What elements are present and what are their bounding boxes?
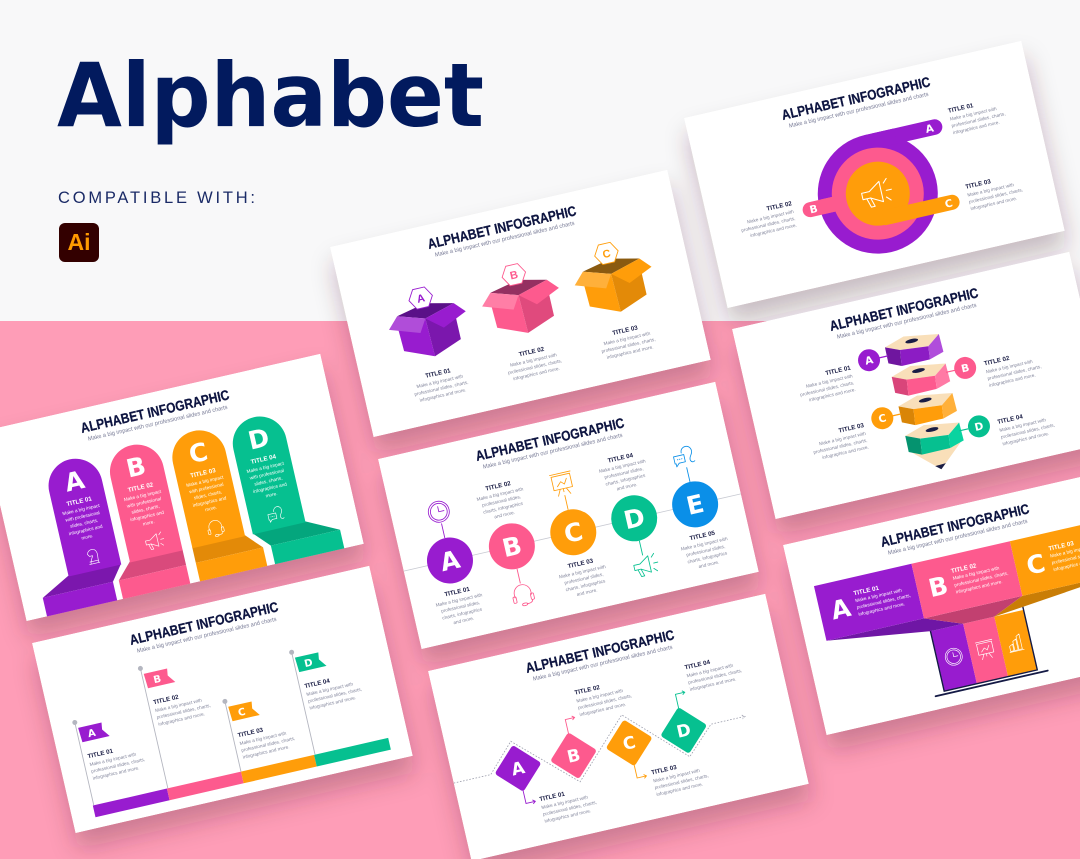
arch D: with professional xyxy=(249,468,284,481)
label B xyxy=(944,341,1044,397)
diamond B: Make a big impact with xyxy=(576,688,624,704)
flag A: infographics and more. xyxy=(92,765,140,781)
node D: TITLE 04 xyxy=(607,452,634,465)
label D xyxy=(957,399,1057,455)
text: title 02: infographics and more. xyxy=(750,223,797,238)
arch B: more. xyxy=(142,519,155,527)
arch B: B xyxy=(123,451,148,484)
node C: TITLE 03 xyxy=(567,558,594,570)
ring A: A xyxy=(924,122,936,136)
pencil segment A xyxy=(883,329,944,369)
node E xyxy=(672,446,728,568)
text: title 03: professional slides, charts, xyxy=(968,187,1023,204)
slide subtitle: Make a big impact with our professional slides and charts xyxy=(482,433,623,471)
flag C: Make a big impact with xyxy=(239,730,287,746)
node D: D xyxy=(621,502,648,535)
text: title 02: professional slides, charts, xyxy=(507,358,562,375)
slide subtitle: Make a big impact with our professional slides and charts xyxy=(434,221,575,259)
flag B: B xyxy=(152,674,162,686)
node B: Make a big impact with xyxy=(476,486,524,502)
label A: infographics and more. xyxy=(809,387,856,403)
slide heading: ALPHABET INFOGRAPHIC xyxy=(828,284,980,334)
node E: and more. xyxy=(698,560,720,569)
flag D: professional slides, charts, xyxy=(307,687,362,704)
arch A: more. xyxy=(81,533,94,541)
label B: professional slides, charts, xyxy=(987,364,1042,381)
diamond A: professional slides, charts, xyxy=(542,800,597,817)
node B xyxy=(476,481,535,606)
label D: professional slides, charts, xyxy=(1000,422,1055,440)
arch D: more. xyxy=(265,491,278,498)
dashed path arrow xyxy=(454,714,746,784)
diamond A: TITLE 01 xyxy=(539,791,566,803)
pencil tip xyxy=(910,440,965,475)
flag C: TITLE 03 xyxy=(237,727,264,739)
banner B: TITLE 02 xyxy=(950,562,978,575)
arch C xyxy=(172,430,268,582)
panel: diamonds slide xyxy=(428,594,809,859)
box B xyxy=(482,263,559,333)
diamond A: Make a big impact with xyxy=(541,794,589,810)
node E: professional slides, xyxy=(686,544,726,558)
diamond C: professional slides, charts, xyxy=(654,773,709,790)
flag A: Make a big impact with xyxy=(89,752,137,767)
arch A: Make a big impact xyxy=(62,503,101,516)
node B: B xyxy=(499,531,525,563)
arch B: infographics and xyxy=(130,510,165,522)
flag D xyxy=(289,650,362,755)
text: title 02: Make a big impact with xyxy=(510,352,558,368)
diamond A: A xyxy=(510,758,528,781)
flag C: professional slides, charts, xyxy=(241,736,296,753)
node C: and more. xyxy=(576,587,598,597)
node A: professional slides, xyxy=(441,600,481,614)
node D: professional slides, xyxy=(604,466,644,480)
icon: Adobe Illustrator xyxy=(59,223,99,262)
banner A: A xyxy=(828,593,854,626)
banner A: Make a big impact with xyxy=(855,588,903,603)
banner A: professional slides, charts, xyxy=(856,593,911,610)
ring C: C xyxy=(944,197,954,211)
node A: charts, infographics xyxy=(442,606,483,621)
flag A: A xyxy=(87,728,97,740)
ring B xyxy=(792,139,933,256)
text: title 03 xyxy=(965,172,1025,211)
arch D: slides, charts, xyxy=(254,475,283,487)
diamond B: TITLE 02 xyxy=(574,684,601,697)
pencil segment C xyxy=(897,388,958,428)
box A: A xyxy=(416,292,426,306)
text: title 03 xyxy=(602,326,656,359)
text: title 03: Make a big impact with xyxy=(967,182,1015,198)
banner wedges xyxy=(826,573,1080,654)
slide subtitle: Make a big impact with our professional slides and charts xyxy=(836,303,977,341)
text: title 03: Make a big impact with xyxy=(603,331,651,346)
icon: megaphone xyxy=(860,178,894,209)
arch D: D xyxy=(245,423,272,456)
node C: C xyxy=(561,517,586,549)
label A: A xyxy=(864,354,875,368)
node D: charts, infographics xyxy=(605,473,646,487)
flag D: TITLE 04 xyxy=(304,677,331,690)
arch B: Make a big impact xyxy=(123,489,162,502)
flag A xyxy=(72,720,145,806)
slide subtitle: Make a big impact with our professional slides and charts xyxy=(136,617,277,655)
node D xyxy=(599,453,658,577)
text: title 01: Make a big impact with xyxy=(949,106,997,122)
text: title 02: professional slides, charts, xyxy=(741,216,796,233)
text: title 01: TITLE 01 xyxy=(425,367,452,380)
flag C xyxy=(222,698,295,772)
pencil segment D xyxy=(904,417,965,457)
box A xyxy=(389,286,466,356)
text: title 02: TITLE 02 xyxy=(766,200,793,213)
flag D: infographics and more. xyxy=(309,695,357,711)
base bar xyxy=(93,738,391,817)
node E: charts, infographics xyxy=(687,550,728,564)
icon: Adobe Illustrator: Ai xyxy=(68,229,90,255)
slide heading: ALPHABET INFOGRAPHIC xyxy=(780,73,932,123)
node B: and more. xyxy=(494,510,515,519)
banner A xyxy=(814,564,924,641)
compatible with label: COMPATIBLE WITH: xyxy=(58,189,255,207)
diamond B xyxy=(551,685,632,778)
banner B xyxy=(911,541,1022,618)
diamond D xyxy=(661,660,742,753)
ring B: B xyxy=(808,203,819,216)
flag C: infographics and more. xyxy=(242,744,290,760)
label A: Make a big impact with xyxy=(805,373,853,389)
label D: Make a big impact with xyxy=(999,417,1047,433)
slide subtitle: Make a big impact with our professional slides and charts xyxy=(887,519,1028,557)
diamond B: B xyxy=(565,745,582,768)
label C: TITLE 03 xyxy=(838,422,865,435)
slide heading: ALPHABET INFOGRAPHIC xyxy=(79,386,231,436)
arch C: more. xyxy=(205,505,217,512)
arch B: with professional xyxy=(126,496,162,509)
node A: A xyxy=(437,545,463,577)
text: title 02: TITLE 02 xyxy=(518,346,545,358)
arch C: Make a big impact xyxy=(186,474,225,488)
arch D xyxy=(232,416,344,564)
panel: arches slide xyxy=(0,354,364,622)
slide heading: ALPHABET INFOGRAPHIC xyxy=(128,598,280,648)
flag D: D xyxy=(303,657,314,670)
arch B xyxy=(110,444,190,599)
node C xyxy=(549,470,606,596)
flag A: professional slides, charts, xyxy=(91,757,146,774)
arch B: TITLE 02 xyxy=(127,481,155,494)
flag B: TITLE 02 xyxy=(153,694,180,706)
box B: B xyxy=(509,269,519,282)
label B: B xyxy=(960,362,971,375)
heading: Alphabet: Alphabet xyxy=(57,44,484,147)
diamond D: D xyxy=(675,720,693,743)
slide heading: ALPHABET INFOGRAPHIC xyxy=(524,626,676,676)
node A xyxy=(426,500,482,624)
text: title 01 xyxy=(414,368,468,402)
banner C: C xyxy=(1024,548,1048,581)
banner B: professional slides, charts, xyxy=(954,571,1009,588)
diamond D: TITLE 04 xyxy=(684,659,711,672)
label B: TITLE 02 xyxy=(983,355,1011,367)
label A: TITLE 01 xyxy=(825,364,852,377)
label C: infographics and more. xyxy=(822,445,869,460)
arch D: Make a big impact xyxy=(246,461,285,474)
arch D: infographics and xyxy=(253,482,288,494)
flag B: infographics and more. xyxy=(158,711,205,727)
banner A: infographics and more. xyxy=(858,601,905,617)
laptop screen xyxy=(920,601,1048,696)
arch A: infographics and xyxy=(68,524,103,536)
diamond C: infographics and more. xyxy=(656,782,703,797)
node B: professional slides, xyxy=(481,494,521,508)
flag C: C xyxy=(237,707,247,719)
arch A: slides, charts, xyxy=(70,518,99,529)
label C: Make a big impact with xyxy=(819,431,867,446)
text: title 03: TITLE 03 xyxy=(965,178,992,191)
arch D: TITLE 04 xyxy=(250,453,277,466)
diamond D: Make a big impact with xyxy=(686,663,734,678)
panel: timeline slide xyxy=(378,382,759,649)
diamond C: C xyxy=(621,733,638,755)
text: title 01 xyxy=(947,96,1007,135)
node B: charts, infographics xyxy=(483,501,524,515)
slide heading: ALPHABET INFOGRAPHIC xyxy=(879,500,1031,550)
label C: C xyxy=(877,412,888,426)
label A xyxy=(794,345,894,404)
pencil segment B xyxy=(890,358,951,398)
panel: megaphone circles slide xyxy=(684,41,1065,308)
text: title 02: Make a big impact with xyxy=(747,209,795,224)
arch C: slides, charts, xyxy=(193,489,222,501)
panel: boxes slide xyxy=(330,170,711,437)
text: title 01: TITLE 01 xyxy=(947,102,975,115)
text: title 03: infographics and more. xyxy=(970,196,1018,211)
diamond B: professional slides, charts, xyxy=(577,693,632,710)
diamond B: infographics and more. xyxy=(579,702,627,717)
text: title 02: infographics and more. xyxy=(513,366,560,381)
box C: C xyxy=(601,248,612,261)
node C: professional slides, xyxy=(564,572,604,585)
node D: Make a big impact with xyxy=(598,458,646,474)
label D: TITLE 04 xyxy=(997,413,1024,426)
text: title 03: TITLE 03 xyxy=(612,324,639,337)
node A: and more. xyxy=(453,616,475,625)
text: title 01: infographics and more. xyxy=(953,120,1000,135)
node E: E xyxy=(684,489,707,521)
slide subtitle: Make a big impact with our professional slides and charts xyxy=(87,405,228,443)
node D: and more. xyxy=(616,482,638,491)
banner C xyxy=(1010,514,1080,596)
light background xyxy=(0,0,1080,321)
node C: charts, infographics xyxy=(565,578,606,592)
panel: pencil slide xyxy=(732,252,1080,519)
node A: Make a big impact with xyxy=(435,592,483,608)
diamond A xyxy=(496,746,597,823)
node C: Make a big impact with xyxy=(559,564,606,579)
flag B: professional slides, charts, xyxy=(156,703,211,720)
banner A: TITLE 01 xyxy=(853,585,880,597)
banner C: TITLE 03 xyxy=(1048,540,1075,553)
arch C: C xyxy=(186,437,211,469)
text: title 03: infographics and more. xyxy=(606,344,654,360)
text: title 01: professional slides, charts, xyxy=(414,380,469,397)
text: title 01: professional slides, charts, xyxy=(951,111,1006,128)
arch A xyxy=(42,458,122,616)
diamond C xyxy=(606,720,709,796)
node B: TITLE 02 xyxy=(485,480,512,493)
banner B: infographics and more. xyxy=(955,579,1003,595)
arch A: A xyxy=(62,465,88,498)
banner B: Make a big impact with xyxy=(952,565,1000,581)
ring A xyxy=(806,118,967,266)
flag A: TITLE 01 xyxy=(87,748,114,760)
slide subtitle: Make a big impact with our professional slides and charts xyxy=(788,92,929,130)
label D: infographics and more. xyxy=(1002,431,1050,446)
label B: infographics and more. xyxy=(989,372,1036,388)
arch A: TITLE 01 xyxy=(66,495,93,508)
text: title 03: professional slides, charts, xyxy=(601,337,656,354)
slide heading: ALPHABET INFOGRAPHIC xyxy=(426,202,578,252)
arch C: infographics and xyxy=(192,495,227,508)
text: title 01: Make a big impact with xyxy=(416,374,464,389)
text: title 02 xyxy=(737,200,798,240)
pink background xyxy=(0,321,1080,859)
flag B xyxy=(138,666,211,788)
node E: Make a big impact with xyxy=(680,536,728,552)
text: title 01: infographics and more. xyxy=(419,387,467,403)
banner B: B xyxy=(926,571,951,603)
label B: Make a big impact with xyxy=(985,359,1033,374)
panel: laptop banner slide xyxy=(783,468,1080,735)
arch B: slides, charts, xyxy=(131,504,160,515)
label D: D xyxy=(974,420,985,434)
arch C: TITLE 03 xyxy=(190,467,217,480)
arch A: with professional xyxy=(65,510,100,523)
panel: flags slide xyxy=(32,566,413,833)
label C xyxy=(807,403,907,462)
diamond D: infographics and more. xyxy=(689,676,737,692)
arch C: with professional xyxy=(189,482,224,494)
diamond D: professional slides, charts, xyxy=(688,668,743,685)
flag B: Make a big impact with xyxy=(155,698,203,713)
diamond C: Make a big impact with xyxy=(653,768,701,783)
text: title 02 xyxy=(508,346,562,380)
slide heading: ALPHABET INFOGRAPHIC xyxy=(474,414,626,464)
box C xyxy=(574,242,652,312)
diamond A: infographics and more. xyxy=(544,808,592,824)
label C: professional slides, charts, xyxy=(813,438,868,455)
flag D: Make a big impact with xyxy=(306,681,354,697)
diamond C: TITLE 03 xyxy=(651,764,678,777)
ring C xyxy=(839,145,961,232)
node E: TITLE 05 xyxy=(689,530,716,542)
node A: TITLE 01 xyxy=(444,586,471,598)
slide subtitle: Make a big impact with our professional slides and charts xyxy=(532,645,673,683)
label A: professional slides, charts, xyxy=(800,380,855,397)
